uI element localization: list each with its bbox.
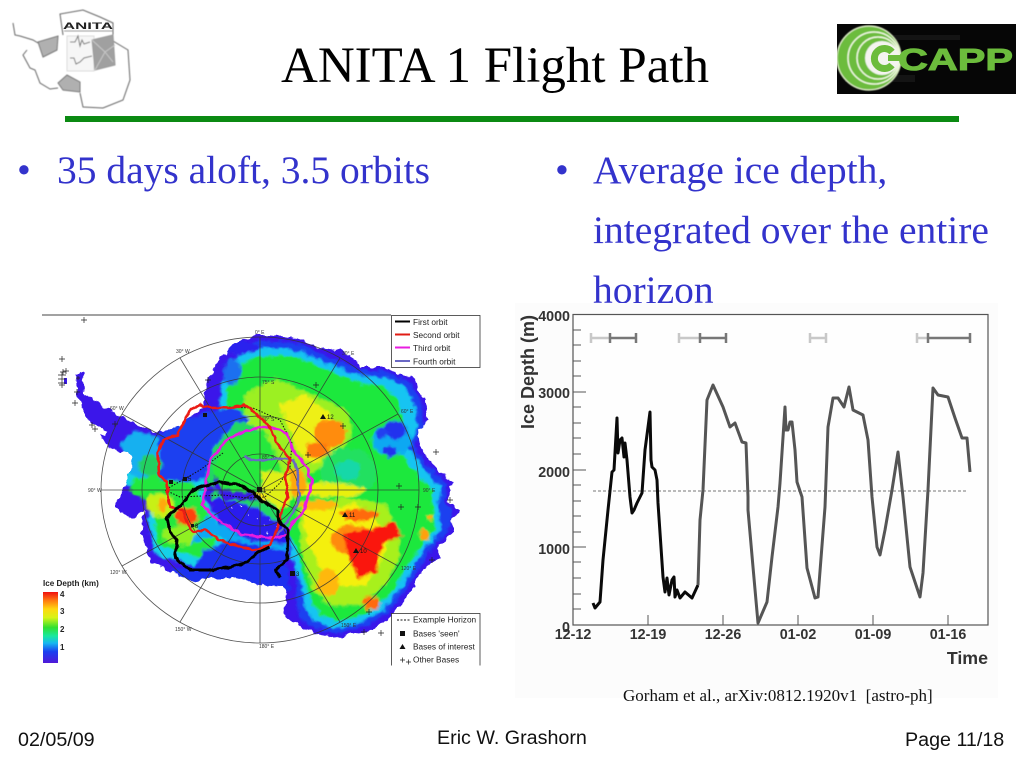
y axis labels: 1000 bbox=[538, 542, 570, 558]
legend: orbits: First orbit bbox=[413, 317, 448, 327]
legend: ice depth colour scale: 4 bbox=[60, 590, 65, 599]
map: Antarctica ice depth with orbits bbox=[42, 314, 480, 666]
grid labels: 150° W bbox=[175, 627, 192, 633]
legend: bases: Bases 'seen' bbox=[413, 628, 460, 638]
x axis labels: 01-09 bbox=[855, 627, 891, 643]
x axis labels: 12-26 bbox=[705, 627, 741, 643]
fourth orbit bbox=[245, 455, 300, 535]
grid labels: 90° W bbox=[88, 488, 102, 494]
logo: CCAPP bbox=[837, 24, 1016, 94]
y axis labels: 4000 bbox=[538, 309, 570, 325]
first orbit bbox=[167, 482, 288, 578]
grid labels: 0° E bbox=[255, 330, 265, 336]
x axis labels: 12-19 bbox=[630, 627, 666, 643]
grid labels: 90° E bbox=[423, 488, 436, 494]
bullet right: • bbox=[555, 148, 569, 192]
example horizon bbox=[165, 407, 292, 498]
depth curve: first part bbox=[593, 412, 698, 608]
bases: 1 bbox=[263, 488, 267, 494]
x axis labels: 12-12 bbox=[555, 627, 591, 643]
legend: ice depth colour scale: 3 bbox=[60, 607, 65, 616]
bases: 10 bbox=[360, 549, 367, 555]
third orbit bbox=[202, 427, 312, 538]
depth curve: later part bbox=[698, 385, 970, 623]
legend: orbits: Second orbit bbox=[413, 330, 460, 340]
legend: orbits: Fourth orbit bbox=[413, 356, 456, 366]
bullet left: • bbox=[17, 148, 31, 192]
bullet right: horizon bbox=[593, 268, 714, 312]
legend: ice depth colour scale: 2 bbox=[60, 625, 65, 634]
grid labels: 60° W bbox=[110, 406, 124, 412]
legend: orbits: Third orbit bbox=[413, 343, 451, 353]
footer author: Eric W. Grashorn bbox=[437, 727, 587, 749]
grid labels: 180° E bbox=[259, 644, 275, 650]
grid labels: 60° E bbox=[401, 409, 414, 415]
continent ice depth colours bbox=[76, 334, 460, 638]
x axis labels: 01-16 bbox=[930, 627, 966, 643]
y axis labels: 0 bbox=[562, 620, 570, 636]
legend: ice depth colour scale: 1 bbox=[60, 643, 65, 652]
range bars bbox=[591, 333, 970, 343]
bullet left: 35 days aloft, 3.5 orbits bbox=[57, 148, 430, 192]
bullet right: integrated over the entire bbox=[593, 208, 989, 252]
legend: orbits bbox=[392, 316, 480, 368]
chart: ice depth vs time bbox=[518, 303, 989, 668]
bases: 12 bbox=[327, 415, 334, 421]
logo: ANITA bbox=[12, 8, 132, 110]
green rule bbox=[65, 116, 959, 122]
x axis title: Time bbox=[947, 648, 988, 668]
grid labels: 30° E bbox=[342, 351, 355, 357]
legend: bases: Example Horizon bbox=[413, 614, 477, 624]
logo wordmark: CAPP bbox=[898, 42, 1013, 77]
grid labels: 150° E bbox=[341, 623, 357, 629]
legend: bases: Bases of interest bbox=[413, 642, 475, 652]
second orbit bbox=[158, 405, 290, 550]
grid labels: 120° W bbox=[110, 570, 127, 576]
x axis labels: 01-02 bbox=[780, 627, 816, 643]
footer page number: Page 11/18 bbox=[905, 729, 1004, 751]
y axis labels: 3000 bbox=[538, 386, 570, 402]
bases: 11 bbox=[349, 513, 356, 519]
grid labels: 75° S bbox=[262, 380, 275, 386]
average depth dashed line bbox=[593, 490, 968, 492]
logo inner C bbox=[874, 49, 892, 68]
grid labels: 85° S bbox=[262, 455, 275, 461]
polar grid bbox=[101, 337, 419, 643]
footer date: 02/05/09 bbox=[18, 729, 95, 751]
grid labels bbox=[88, 330, 436, 650]
y axis title: Ice Depth (m) bbox=[518, 315, 538, 429]
x axis labels bbox=[555, 627, 966, 643]
grid labels: 120° E bbox=[401, 566, 417, 572]
legend: bases bbox=[385, 614, 485, 676]
y axis labels bbox=[538, 309, 570, 636]
y axis labels: 2000 bbox=[538, 465, 570, 481]
bases bbox=[169, 413, 367, 578]
title: ANITA 1 Flight Path bbox=[281, 38, 709, 94]
frame lines bbox=[42, 314, 391, 316]
bases: 3 bbox=[296, 572, 300, 578]
bullet right: Average ice depth, bbox=[593, 148, 887, 192]
other bases bbox=[305, 382, 453, 636]
grid labels: 80° S bbox=[262, 417, 275, 423]
bases: 8 bbox=[195, 524, 199, 530]
outlying islands and bases bbox=[64, 372, 114, 446]
logo text: ANITA bbox=[63, 21, 113, 32]
axes frame bbox=[573, 314, 988, 625]
bases: 5 bbox=[188, 477, 192, 483]
legend: ice depth colour scale bbox=[43, 579, 99, 663]
legend: bases: Other Bases bbox=[413, 654, 459, 664]
grid labels: 30° W bbox=[176, 349, 190, 355]
citation: Gorham et al., arXiv:0812.1920v1 [astro-ph] bbox=[623, 686, 933, 705]
legend: ice depth colour scale: Ice Depth (km) bbox=[43, 579, 99, 588]
axis ticks bbox=[573, 330, 948, 625]
bullet right bbox=[555, 148, 989, 312]
